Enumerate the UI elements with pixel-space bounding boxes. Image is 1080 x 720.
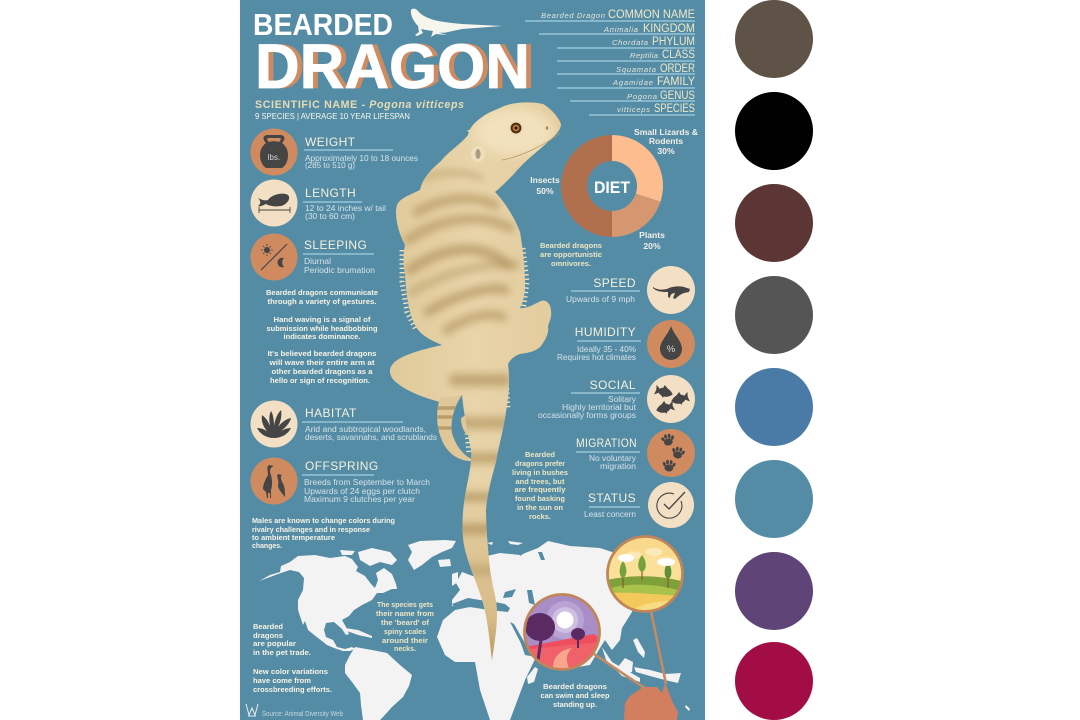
status heading: STATUS: [588, 491, 636, 505]
text block: pet trade: New color variations: [253, 667, 328, 676]
panel: offspring: [250, 458, 430, 504]
icon: school of fish: [647, 375, 695, 423]
text block: pet trade: in the pet trade.: [253, 648, 311, 657]
slice: plants: [612, 194, 660, 237]
taxonomy table: Animalia: [603, 25, 638, 34]
diet label: lizards: Small Lizards &: [634, 127, 698, 137]
leg bands: [437, 406, 456, 430]
text block: basking: living in bushes: [512, 468, 568, 477]
map seas: [452, 546, 545, 653]
humidity text: Ideally 35 - 40%: [577, 344, 636, 354]
taxonomy table: Chordata: [612, 38, 648, 47]
icon: kettlebell: [250, 128, 298, 176]
taxonomy table: ORDER: [660, 63, 695, 75]
icon: logo: [246, 704, 258, 716]
taxonomy table: Reptilia: [630, 51, 658, 60]
text block: basking: and trees, but: [516, 477, 565, 486]
text block: pet trade: crossbreeding efforts.: [253, 685, 332, 694]
panel: background: [240, 0, 705, 720]
panel: weight: [250, 128, 418, 176]
habitat text: [305, 424, 437, 442]
text block: basking: dragons prefer: [515, 459, 565, 468]
connector lines to Australia: [594, 611, 666, 689]
text block: beard name: around their: [382, 636, 428, 645]
social text: occasionally forms groups: [538, 410, 636, 420]
social heading: SOCIAL: [590, 378, 636, 392]
diet label: plants: Plants: [639, 230, 665, 240]
migration text: migration: [600, 461, 636, 471]
bands: [408, 173, 516, 570]
diet label: DIET: [594, 178, 631, 197]
taxonomy table: CLASS: [662, 49, 695, 61]
offspring text: Upwards of 24 eggs per clutch: [304, 486, 420, 496]
text block: communication: other bearded dragons as a: [272, 367, 373, 376]
taxonomy table: Pogona: [627, 92, 657, 101]
icon: sun and moon: [250, 234, 298, 280]
scene: savanna daytime: [606, 535, 684, 613]
diet label: lizards: 30%: [657, 146, 675, 156]
panel: sleeping: [250, 234, 375, 280]
humidity heading: HUMIDITY: [575, 325, 636, 339]
habitat text: deserts, savannahs, and scrublands: [305, 432, 437, 442]
icon: two birds: [250, 458, 298, 504]
text block: swim and sleep: can swim and sleep: [540, 691, 610, 700]
body: [390, 102, 561, 660]
tail shading: [462, 498, 497, 660]
offspring text: Breeds from September to March: [304, 477, 430, 487]
text block: communication: It's believed bearded dragons: [268, 349, 376, 358]
subheading: 9 SPECIES | AVERAGE 10 YEAR LIFESPAN: [255, 112, 410, 121]
infographic canvas: [240, 0, 813, 720]
weight text: [305, 153, 418, 170]
text block: communication: indicates dominance.: [284, 332, 360, 341]
diet label: insects: [530, 175, 560, 196]
panel: migration: [576, 429, 695, 477]
text block: pet trade: [253, 622, 332, 694]
length text: 12 to 24 inches w/ tail: [305, 203, 386, 213]
mouth line: [502, 133, 560, 160]
taxonomy table: KINGDOM: [643, 23, 695, 35]
text block: basking: in the sun on: [517, 503, 563, 512]
diet label: insects: Insects: [530, 175, 560, 185]
icon: agave plant: [250, 400, 298, 448]
length heading: LENGTH: [305, 186, 356, 200]
text block: omnivores: omnivores.: [551, 259, 591, 268]
panel: habitat: [250, 400, 437, 448]
text block: communication: Hand waving is a signal of: [274, 315, 371, 324]
offspring text: Maximum 9 clutches per year: [304, 494, 415, 504]
text block: basking: found basking: [515, 494, 565, 503]
taxonomy table: PHYLUM: [652, 36, 695, 48]
title line 1: BEARDED: [253, 7, 393, 42]
migration text: [589, 453, 637, 471]
taxonomy table: COMMON NAME: [608, 9, 695, 21]
text block: basking: Bearded: [525, 450, 555, 459]
taxonomy table: Bearded Dragon: [541, 11, 605, 20]
social text: Solitary: [608, 394, 637, 404]
text block: basking: [512, 450, 568, 521]
text block: communication: Bearded dragons communicate: [266, 288, 378, 297]
weight text: (285 to 510 g): [305, 160, 355, 170]
panel: humidity: [557, 320, 695, 368]
length text: (30 to 60 cm): [305, 211, 355, 221]
bearded dragon illustration: [390, 102, 561, 662]
text block: communication: through a variety of gestures.: [268, 297, 376, 306]
source: Source: Animal Diversity Web: [262, 709, 343, 718]
title: [253, 7, 535, 102]
text block: communication: submission while headbobbing: [266, 324, 378, 333]
taxonomy table: [525, 9, 695, 115]
text block: swim and sleep: [540, 682, 610, 709]
taxonomy table: GENUS: [660, 90, 695, 102]
humidity text: Requires hot climates: [557, 352, 636, 362]
habitat heading: HABITAT: [305, 406, 357, 420]
diet label: plants: [639, 230, 665, 251]
title shadow: DRAGON: [260, 32, 535, 102]
taxonomy table: vitticeps: [617, 105, 650, 114]
social text: Highly territorial but: [562, 402, 637, 412]
ear: [471, 146, 485, 162]
taxonomy table: Agamidae: [612, 78, 653, 87]
diet label: lizards: Rodents: [649, 136, 683, 146]
social text: [538, 394, 637, 420]
sleeping text: Periodic brumation: [304, 265, 375, 275]
panel: social: [538, 375, 695, 423]
humidity text: [557, 344, 636, 362]
habitat text: Arid and subtropical woodlands,: [305, 424, 426, 434]
icon: fish with ruler: [250, 180, 298, 226]
spines: [402, 130, 527, 454]
text block: communication: [266, 288, 378, 385]
text block: communication: will wave their entire arm at: [268, 358, 375, 367]
text block: beard name: necks.: [394, 644, 416, 653]
text block: communication: hello or sign of recognition.: [270, 376, 370, 385]
weight text: Approximately 10 to 18 ounces: [305, 153, 418, 163]
weight heading: WEIGHT: [305, 135, 356, 149]
offspring heading: OFFSPRING: [305, 459, 379, 473]
nostril: [546, 126, 548, 130]
text block: omnivores: [540, 241, 602, 268]
diet label: lizards: [634, 127, 698, 156]
taxonomy table: FAMILY: [657, 76, 695, 88]
icon: kettlebell: lbs.: [268, 153, 280, 162]
diet label: plants: 20%: [643, 241, 661, 251]
text block: males colors: changes.: [252, 541, 282, 550]
diet label: insects: 50%: [536, 186, 554, 196]
text block: males colors: to ambient temperature: [252, 533, 335, 542]
icon: water drop: %: [667, 344, 676, 355]
offspring text: [304, 477, 430, 504]
text block: beard name: spiny scales: [384, 627, 426, 636]
text block: beard name: their name from: [376, 609, 434, 618]
migration heading: MIGRATION: [576, 436, 637, 450]
panel: status: [584, 482, 694, 528]
head highlight: [475, 108, 555, 156]
text block: basking: rocks.: [529, 512, 551, 521]
icon: paw prints: [647, 429, 695, 477]
panel: length: [250, 180, 386, 226]
text block: pet trade: dragons: [253, 631, 283, 640]
eye: [509, 121, 523, 135]
status text: Least concern: [584, 509, 636, 519]
sleeping heading: SLEEPING: [304, 238, 367, 252]
text block: basking: are frequently: [514, 485, 566, 494]
sleeping text: [304, 256, 375, 275]
scientific name: SCIENTIFIC NAME - Pogona vitticeps: [255, 99, 465, 111]
text block: omnivores: are opportunistic: [540, 250, 602, 259]
panel: speed: [566, 266, 695, 314]
text block: males colors: Males are known to change colors during: [252, 516, 395, 525]
title line 2: DRAGON: [255, 32, 530, 102]
text block: males colors: rivalry challenges and in response: [252, 525, 370, 534]
diet donut chart: [561, 135, 663, 237]
palette swatches: [735, 0, 813, 720]
text block: beard name: The species gets: [377, 600, 433, 609]
text block: pet trade: have come from: [253, 676, 311, 685]
text block: beard name: [376, 600, 434, 653]
slice: insects: [561, 135, 612, 237]
taxonomy table: Squamata: [616, 65, 656, 74]
icon: check mark: [648, 482, 694, 528]
text block: pet trade: are popular: [253, 639, 296, 648]
scene: savanna night: [523, 593, 601, 671]
Australia highlight: [624, 683, 678, 720]
taxonomy table: SPECIES: [654, 103, 695, 115]
text block: beard name: the 'beard' of: [381, 618, 430, 627]
world map: [259, 540, 690, 720]
icon: cheetah: [647, 266, 695, 314]
speed heading: SPEED: [593, 276, 636, 290]
icon: lizard silhouette: [411, 9, 502, 37]
slice: small lizards and rodents: [612, 135, 663, 202]
text block: swim and sleep: standing up.: [553, 700, 597, 709]
text block: swim and sleep: Bearded dragons: [543, 682, 607, 691]
text block: omnivores: Bearded dragons: [540, 241, 602, 250]
migration text: No voluntary: [589, 453, 637, 463]
speed text: Upwards of 9 mph: [566, 294, 635, 304]
sleeping text: Diurnal: [304, 256, 331, 266]
toe claw: [461, 415, 472, 436]
text block: pet trade: Bearded: [253, 622, 283, 631]
length text: [305, 203, 386, 221]
text block: males colors: [252, 516, 395, 550]
hind leg: [437, 395, 477, 461]
